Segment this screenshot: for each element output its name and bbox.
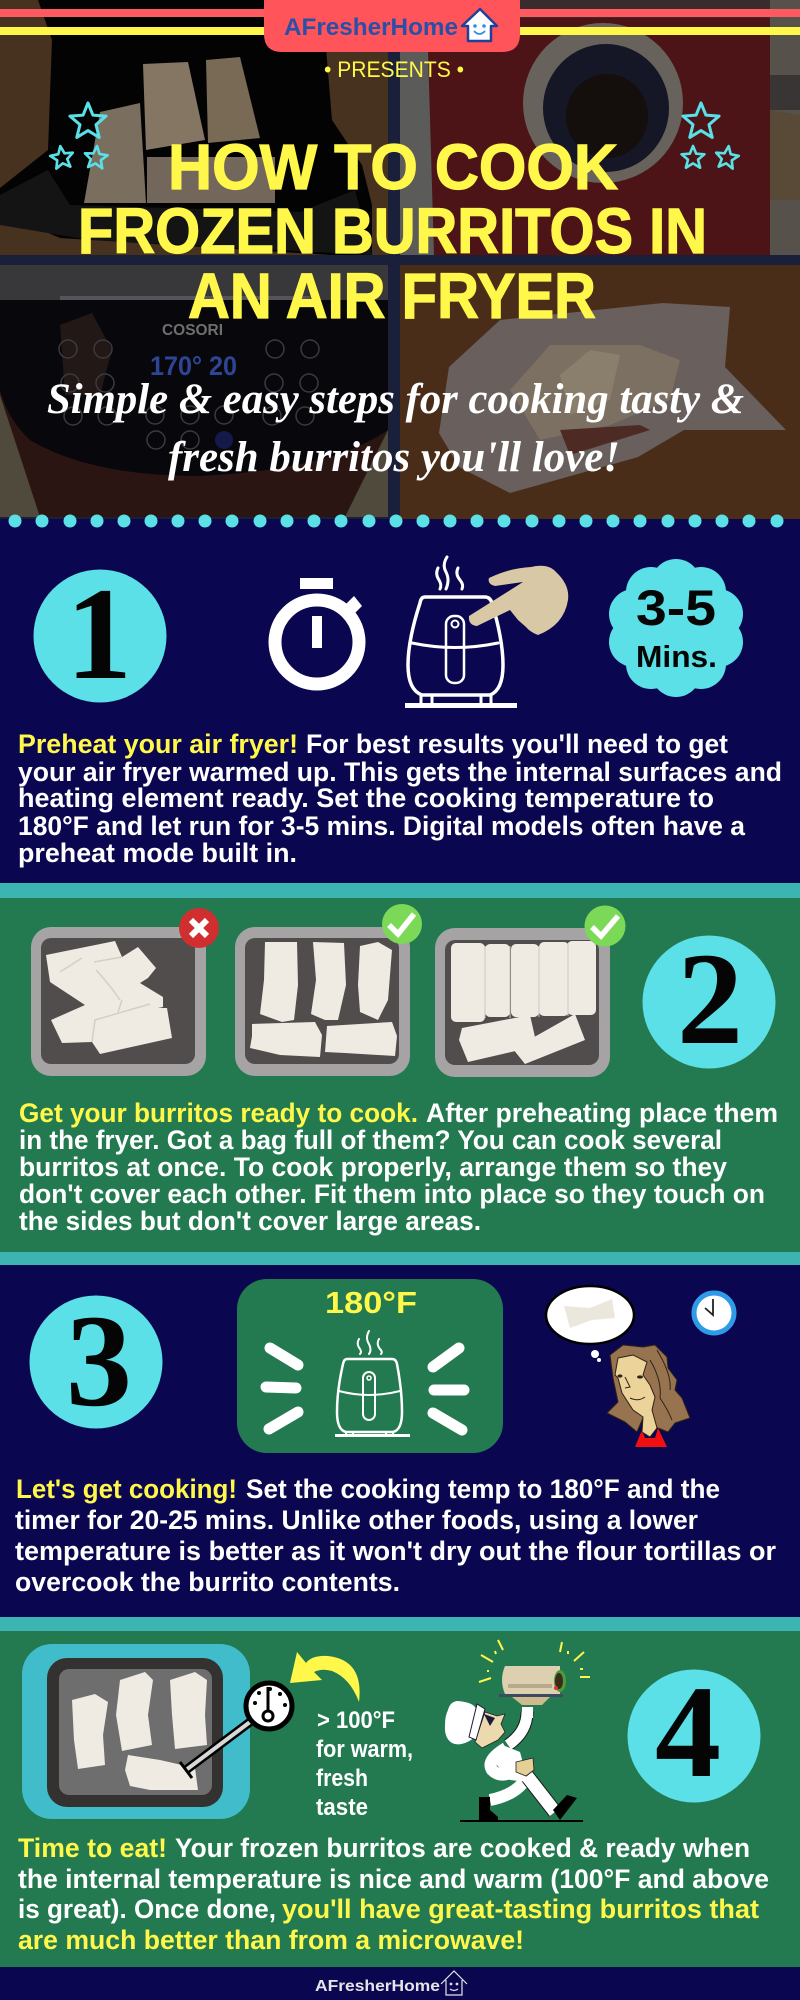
- number badge 4: [628, 1658, 760, 1805]
- temperature note: [316, 1707, 413, 1821]
- logo badge: [264, 0, 520, 52]
- number badge 3: 3: [66, 1287, 132, 1434]
- divider band: [0, 1252, 800, 1265]
- tray: burritos side by side: [235, 927, 410, 1076]
- step 4 text: Time to eat!: [18, 1833, 167, 1863]
- illustration: thinking woman: [607, 1345, 690, 1447]
- footer wordmark: AFresherHome: [315, 1978, 440, 1995]
- tray: overlapping burritos: [31, 927, 206, 1076]
- temperature panel: [237, 1279, 503, 1453]
- icon: green check 1: [382, 904, 422, 944]
- time badge: 3-5: [636, 580, 716, 636]
- sparkle rays: [479, 1640, 590, 1682]
- icon: footer house: [441, 1971, 467, 1995]
- tray with thermometer: [22, 1644, 292, 1819]
- title: [78, 131, 707, 332]
- panel: step 4: [0, 1631, 800, 1967]
- title: FROZEN BURRITOS IN: [78, 195, 707, 267]
- icon: air fryer: [405, 557, 517, 708]
- divider band: [0, 1617, 800, 1631]
- step 3 text: Let's get cooking!: [16, 1474, 237, 1504]
- thought bubble: [546, 1286, 634, 1362]
- step 2 text: the sides but don't cover large areas.: [19, 1206, 481, 1236]
- number badge 1: 1: [66, 560, 132, 707]
- number badge 3: [30, 1287, 162, 1434]
- step 3 text: overcook the burrito contents.: [15, 1567, 400, 1597]
- panel: step 1: [0, 514, 800, 883]
- step 1 text: [18, 729, 782, 868]
- illustration: chef carrying burrito: [445, 1640, 590, 1822]
- dotted border: [8, 514, 784, 528]
- step 4 text: [18, 1833, 769, 1955]
- icon: red cross: [179, 908, 219, 948]
- chef hat: [445, 1701, 478, 1744]
- icon: pointing hand: [469, 566, 568, 635]
- photo: red air fryer: [400, 0, 800, 255]
- shoes: [479, 1797, 498, 1821]
- icon: green check 2: [584, 906, 626, 946]
- time badge: [609, 559, 743, 697]
- step 4 text: Your frozen burritos are cooked & ready when: [175, 1833, 750, 1863]
- burrito: [502, 1666, 560, 1694]
- panel: step 2: [0, 898, 800, 1252]
- step 3 text: timer for 20-25 mins. Unlike other foods, using a lower: [15, 1505, 698, 1535]
- step 2 text: burritos at once. To cook properly, arrange them so they: [19, 1152, 727, 1182]
- legs: [490, 1780, 525, 1800]
- title: AN AIR FRYER: [188, 260, 596, 332]
- icon: thermometer: [180, 1683, 292, 1778]
- step 1 text: your air fryer warmed up. This gets the internal surfaces and: [18, 757, 782, 787]
- header photo collage: [0, 0, 800, 520]
- heat rays: [266, 1348, 464, 1430]
- temperature note: > 100°F: [317, 1707, 395, 1734]
- step 1 text: For best results you'll need to get: [306, 729, 728, 759]
- temperature display: 170° 20: [150, 351, 237, 381]
- stars: left: [49, 103, 108, 169]
- step 4 text: the internal temperature is nice and warm (100°F and above: [18, 1864, 769, 1894]
- step 4 text: you'll have great-tasting burritos that: [282, 1894, 759, 1924]
- temperature label: 180°F: [325, 1285, 417, 1320]
- title: HOW TO COOK: [168, 131, 618, 203]
- arrow: curved yellow: [290, 1652, 360, 1702]
- step 4 text: is great). Once done,: [18, 1894, 276, 1924]
- head: [475, 1712, 505, 1748]
- footer: [0, 1967, 800, 2000]
- icon: stopwatch: [275, 578, 362, 684]
- step 4 text: are much better than from a microwave!: [18, 1925, 524, 1955]
- temperature note: fresh: [316, 1765, 368, 1792]
- number badge 2: 2: [677, 925, 743, 1072]
- time badge: Mins.: [636, 639, 717, 674]
- brand label: COSORI: [162, 322, 223, 339]
- step 2 text: don't cover each other. Fit them into place so they touch on: [19, 1179, 765, 1209]
- step 3 text: [15, 1474, 776, 1597]
- top stripes: [0, 9, 800, 35]
- icon: clock: [694, 1293, 734, 1333]
- step 2 text: [19, 1098, 778, 1236]
- tray: burritos packed: [435, 928, 610, 1077]
- number badge 1: [34, 560, 166, 707]
- photo: burritos in air fryer basket: [0, 0, 388, 255]
- stars: right: [682, 103, 740, 169]
- icon: small air fryer: [335, 1331, 410, 1437]
- step 3 text: Set the cooking temp to 180°F and the: [246, 1474, 720, 1504]
- number badge 2: [642, 925, 776, 1072]
- subtitle: [47, 376, 744, 481]
- temperature note: for warm,: [316, 1736, 413, 1763]
- temperature note: taste: [316, 1794, 368, 1821]
- step 2 text: in the fryer. Got a bag full of them? You can cook several: [19, 1125, 722, 1155]
- step 2 text: Get your burritos ready to cook.: [19, 1098, 418, 1128]
- step 1 text: preheat mode built in.: [18, 838, 297, 868]
- step 2 text: After preheating place them: [426, 1098, 778, 1128]
- photo: Cosori control panel: [0, 265, 388, 517]
- presents label: • PRESENTS •: [324, 57, 464, 82]
- steam: [437, 557, 463, 589]
- subtitle: Simple & easy steps for cooking tasty &: [47, 376, 744, 423]
- step 1 text: 180°F and let run for 3-5 mins. Digital models often have a: [18, 811, 746, 841]
- divider band: [0, 883, 800, 898]
- logo wordmark: AFresherHome: [284, 14, 458, 41]
- torso and lower arm: [491, 1748, 513, 1775]
- step 3 text: temperature is better as it won't dry out the flour tortillas or: [15, 1536, 776, 1566]
- number badge 4: 4: [655, 1658, 721, 1805]
- photo: burritos in paper towel: [400, 265, 800, 520]
- step 1 text: heating element ready. Set the cooking temperature to: [18, 783, 714, 813]
- panel: step 3: [0, 1265, 800, 1617]
- step 1 text: Preheat your air fryer!: [18, 729, 298, 759]
- raised arm: [508, 1712, 527, 1745]
- collage dividers: [0, 0, 800, 520]
- icon: smiling house: [462, 9, 497, 41]
- subtitle: fresh burritos you'll love!: [168, 434, 620, 481]
